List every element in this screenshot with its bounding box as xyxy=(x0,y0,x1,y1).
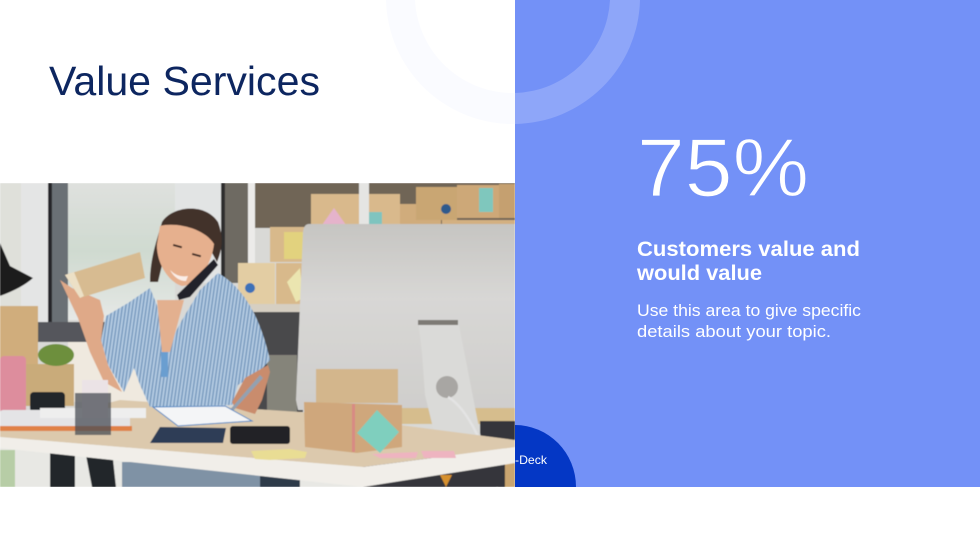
desk front edge xyxy=(0,437,515,487)
decorative ring xyxy=(386,0,640,124)
woman xyxy=(60,208,270,414)
shirt xyxy=(101,273,270,407)
window background xyxy=(0,183,255,402)
phone xyxy=(177,259,218,300)
area behind desk at right xyxy=(400,408,515,441)
badge: dark blue quarter circle xyxy=(515,425,576,487)
photo: woman working at a desk with parcels xyxy=(0,183,515,487)
raised arm xyxy=(60,280,122,392)
writing hand xyxy=(232,365,270,414)
panel: blue statistic background xyxy=(515,0,980,487)
parcels with sticky note xyxy=(304,369,402,453)
desk top xyxy=(0,400,515,467)
desk items xyxy=(0,380,456,460)
body text xyxy=(637,301,862,341)
lamp, left boxes and plant xyxy=(0,243,74,413)
held parcel xyxy=(74,252,146,296)
shelves with boxes xyxy=(238,183,515,413)
monitor xyxy=(296,224,515,410)
chest and top xyxy=(157,300,184,352)
subheading: would value xyxy=(636,262,762,285)
body text: Use this area to give specific xyxy=(637,301,862,320)
pen xyxy=(228,375,263,412)
subheading: Customers value and xyxy=(637,238,860,261)
under-desk area: chair and jeans xyxy=(0,448,515,487)
hair xyxy=(150,208,222,282)
face xyxy=(157,225,214,286)
body text: details about your topic. xyxy=(637,322,831,341)
title: Value Services xyxy=(49,58,320,104)
footer label: -Deck xyxy=(515,453,548,467)
statistic: 75%: 75% xyxy=(637,121,809,214)
subheading xyxy=(636,238,860,285)
monitor stand xyxy=(418,320,498,487)
